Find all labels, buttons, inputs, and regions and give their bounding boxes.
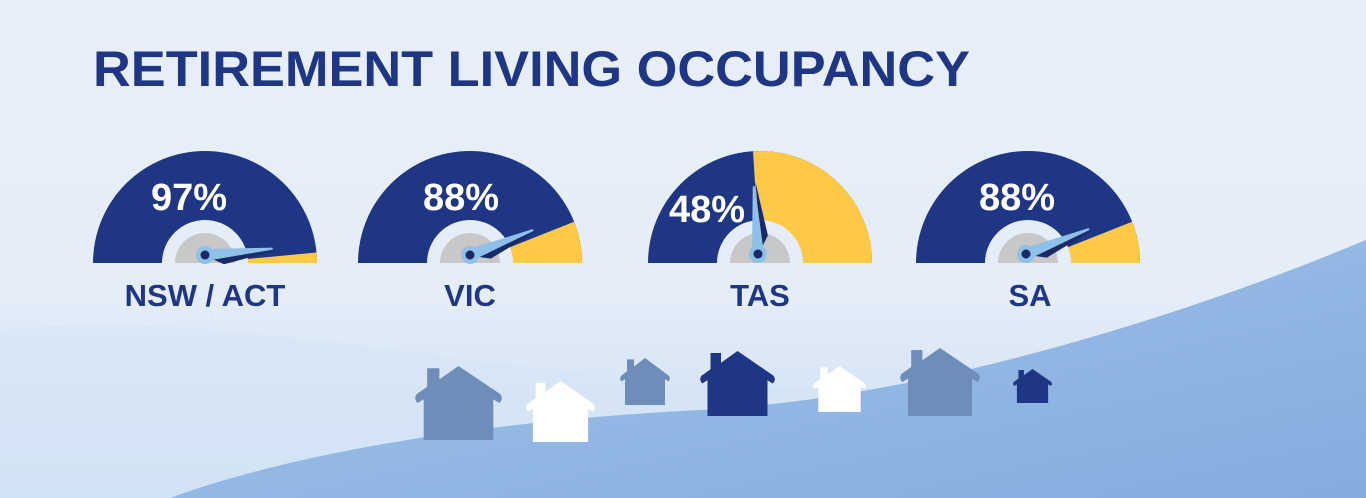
gauge: SA: SA <box>1008 278 1052 313</box>
gauge: SA <box>916 151 1140 313</box>
blue hill <box>170 240 1366 498</box>
icon: house 7 <box>1013 369 1052 403</box>
gauge: VIC: 88% <box>423 177 499 219</box>
title: RETIREMENT LIVING OCCUPANCY <box>93 41 970 97</box>
gauge: SA: 88% <box>979 177 1055 219</box>
gauge: VIC: VIC <box>444 278 496 313</box>
gauge: TAS: TAS <box>730 278 790 313</box>
gauge: TAS: 48% <box>669 189 745 231</box>
houses row <box>415 348 1052 442</box>
gauge: NSW / ACT: NSW / ACT <box>125 278 285 313</box>
icon: house 2 <box>526 381 595 442</box>
icon: house 3 <box>620 358 670 405</box>
gauge: TAS <box>648 151 872 313</box>
gauge: NSW / ACT: 97% <box>151 177 227 219</box>
gauge: VIC <box>358 151 582 313</box>
icon: house 5 <box>813 366 866 412</box>
gauge: NSW / ACT <box>93 151 317 313</box>
icon: house 6 <box>900 348 980 416</box>
icon: house 1 <box>415 366 502 440</box>
icon: house 4 <box>700 351 775 416</box>
